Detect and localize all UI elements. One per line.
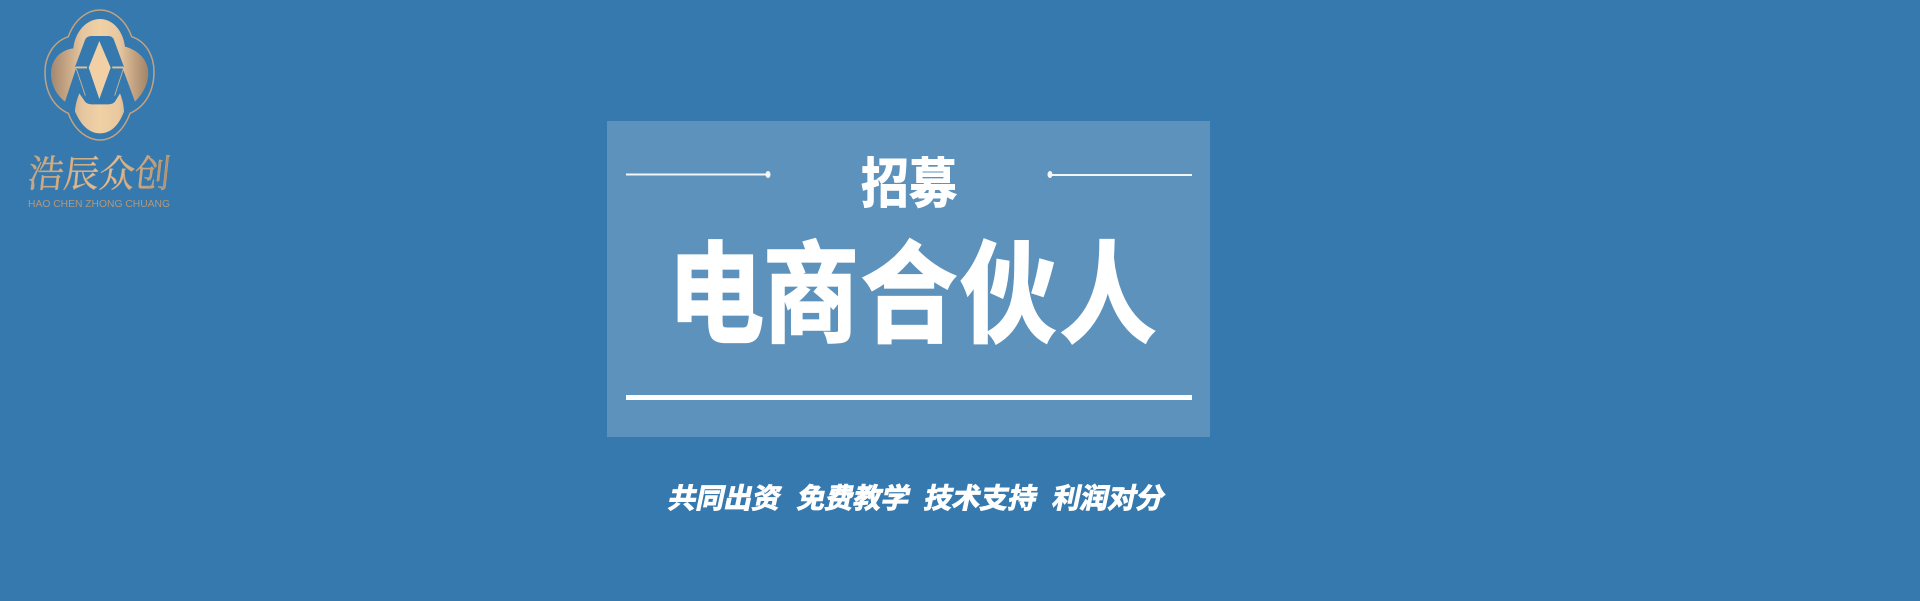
logo calligraphy: 浩辰众创: [26, 154, 172, 196]
subtitle: recruiting: 招募: [861, 154, 957, 214]
tagline: [666, 482, 1168, 514]
tag 1: 共同出资: [666, 482, 784, 514]
logo pinyin: HAO CHEN ZHONG CHUANG: [28, 198, 170, 210]
tag 3: 技术支持: [922, 482, 1040, 514]
logo: [26, 10, 172, 210]
bottom rule: [626, 395, 1192, 400]
panel: [607, 121, 1210, 437]
left ornament line: [626, 171, 770, 178]
right ornament line: [1048, 171, 1192, 178]
tag 2: 免费教学: [795, 482, 913, 514]
logo emblem: [45, 10, 154, 140]
tag 4: 利润对分: [1050, 482, 1168, 514]
main title: 电商合伙人: [668, 233, 1156, 357]
